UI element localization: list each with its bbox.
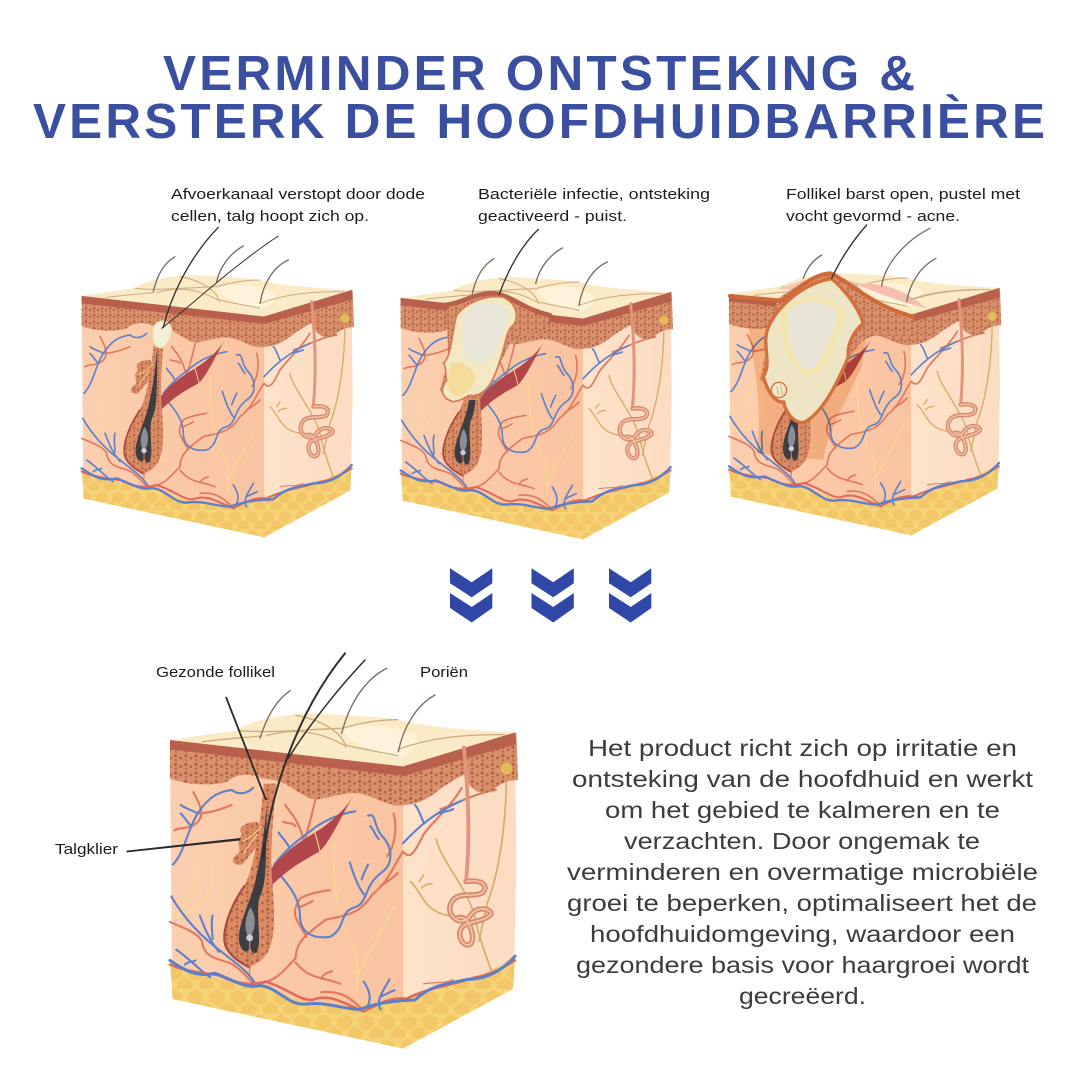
label: Talgklier [55,838,240,858]
title: VERSTERK DE HOOFDHUIDBARRIÈRE [33,93,1045,149]
body text: verminderen en overmatige microbiële [567,859,1038,885]
body text: groei te beperken, optimaliseert het de [567,890,1037,916]
caption: stage 3: Follikel barst open, pustel met [786,186,1021,203]
body text: gecreëerd. [739,983,866,1009]
icon: sebum plug [153,321,172,348]
label: Talgklier: Talgklier [55,841,118,858]
panel: skin diagram ruptured follicle [729,225,1001,535]
body text: hoofdhuidomgeving, waardoor een [590,921,1015,947]
body text: Het product richt zich op irritatie en [588,735,1017,761]
pimple [440,229,550,402]
label: Gezonde follikel: Gezonde follikel [156,664,275,681]
caption: stage 2 [478,186,710,225]
title [33,46,1045,149]
acne pustule [730,225,977,476]
caption: stage 3: vocht gevormd - acne. [786,208,960,225]
body text [567,735,1038,1009]
caption: stage 3 [786,186,1021,225]
panel: healthy skin diagram [170,713,518,1049]
body text: gezondere basis voor haargroei wordt [576,952,1030,978]
icon: double chevron arrow right [609,568,651,622]
hairs on healthy skin [260,653,435,857]
panel: skin diagram infected follicle [401,229,673,539]
body text: om het gebied te kalmeren en te [605,797,1000,823]
caption: stage 1 [171,186,425,225]
body text: verzachten. Door ongemak te [624,828,980,854]
body text: ontsteking van de hoofdhuid en werkt [572,766,1034,792]
label: Gezonde follikel [156,664,275,800]
label: Poriën: Poriën [420,664,468,681]
title: VERMINDER ONTSTEKING & [163,46,915,101]
caption: stage 1: cellen, talg hoopt zich op. [171,208,369,225]
icon: double chevron arrow middle [532,568,574,622]
caption: stage 2: Bacteriële infectie, ontsteking [478,186,710,203]
panel: skin diagram clogged duct [82,227,354,537]
caption: stage 1: Afvoerkanaal verstopt door dode [171,186,425,203]
clogged hairs [162,227,278,328]
caption: stage 2: geactiveerd - puist. [478,208,627,225]
icon: double chevron arrow left [450,568,492,622]
